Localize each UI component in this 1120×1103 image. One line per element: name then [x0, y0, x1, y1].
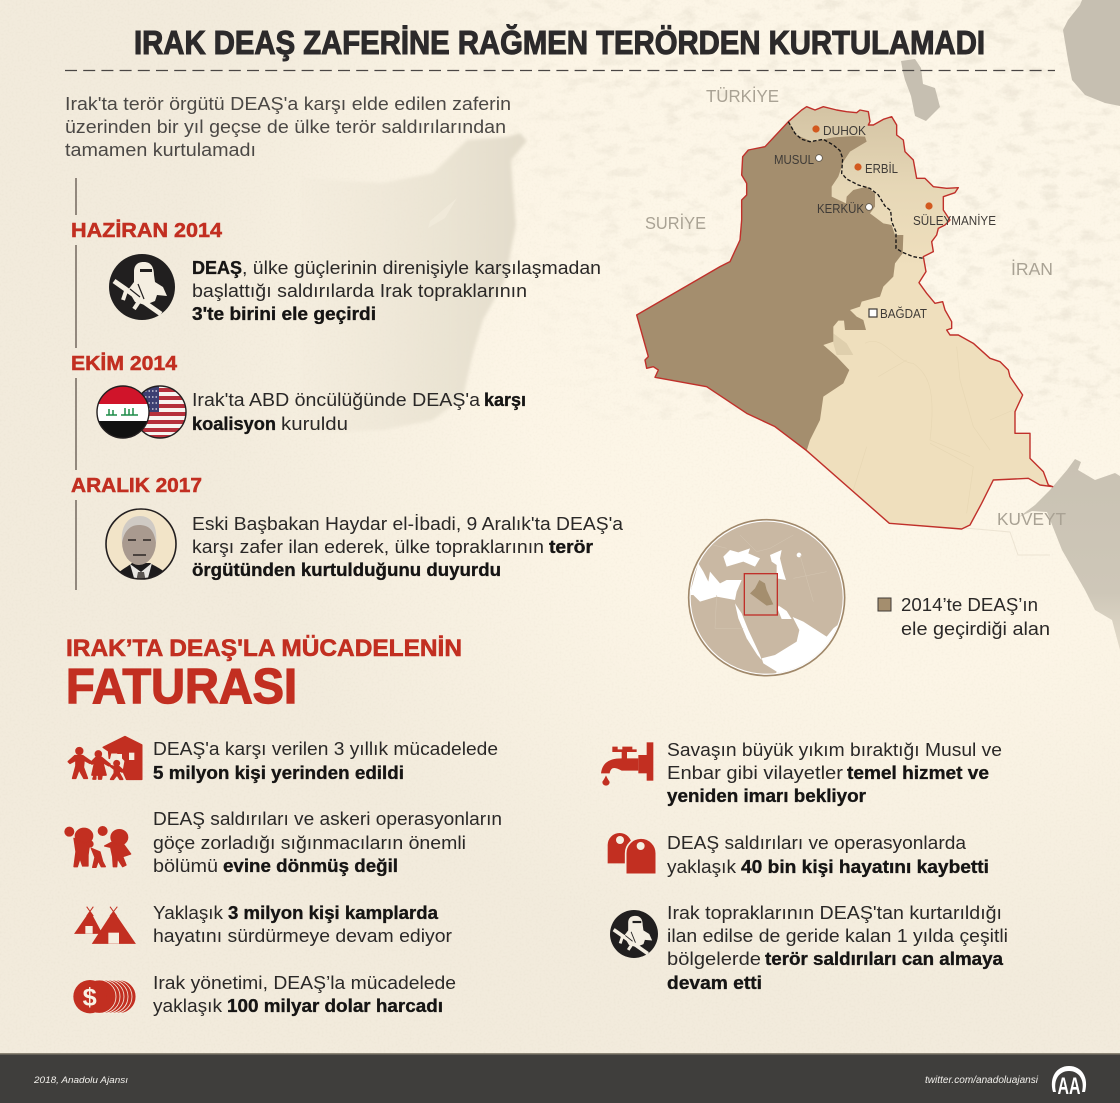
neighbouring country labels: TÜRKİYE — [706, 86, 779, 106]
icon: tents — [75, 907, 135, 944]
text: ongoing attacks: bölgelerde — [667, 948, 761, 969]
logo: Anadolu Agency: AA — [1058, 1073, 1080, 1100]
text: Ekim 2014: karşı — [484, 389, 526, 410]
text: refugees: göçe zorladığı sığınmacıların önemli — [153, 832, 466, 853]
Iraq shape with DEAŞ-held area — [636, 106, 1054, 530]
intro text: üzerinden bir yıl geçse de ülke terör saldırılarından — [65, 116, 506, 137]
heading: Ekim 2014: EKİM 2014 — [71, 352, 178, 375]
footer twitter handle: twitter.com/anadoluajansi — [925, 1075, 1039, 1086]
city markers and labels: BAĞDAT — [880, 306, 927, 321]
heading: Aralık 2017: ARALIK 2017 — [71, 475, 202, 497]
text: deaths: DEAŞ saldırıları ve operasyonlarda — [667, 832, 967, 853]
neighbouring country labels: KUVEYT — [997, 509, 1066, 529]
text: Haziran 2014: 3'te birini ele geçirdi — [192, 303, 376, 324]
icon: refugees with bundles — [65, 827, 131, 867]
panel: right list — [601, 739, 1008, 993]
text: deaths — [667, 832, 989, 877]
neighbouring country labels — [645, 86, 1066, 529]
text: refugees: evine dönmüş değil — [223, 855, 398, 876]
text: spending: 100 milyar dolar harcadı — [227, 995, 443, 1016]
text: reconstruction: Savaşın büyük yıkım bıraktığı Musul ve — [667, 739, 1002, 760]
icon: US and Iraq flags — [97, 386, 186, 438]
text: ongoing attacks: Irak topraklarının DEAŞ'tan kurtarıldığı — [667, 902, 1002, 923]
city markers and labels: DUHOK — [823, 124, 867, 138]
text: reconstruction: temel hizmet ve — [847, 762, 989, 783]
icon: masked militant — [109, 254, 175, 320]
footer credit: 2018, Anadolu Ajansı — [33, 1075, 128, 1086]
text: refugees — [153, 808, 502, 876]
text: Ekim 2014: koalisyon — [192, 413, 276, 434]
text: ongoing attacks: devam etti — [667, 972, 762, 993]
text: ongoing attacks: ilan edilse de geride kalan 1 yılda çeşitli — [667, 925, 1008, 946]
text: deaths: 40 bin kişi hayatını kaybetti — [741, 856, 989, 877]
heading: cost of the fight: FATURASI — [66, 660, 297, 714]
text: ongoing attacks — [667, 902, 1008, 993]
heading: cost of the fight: IRAK’TA DEAŞ'LA MÜCADELENİN — [66, 635, 462, 662]
icon: masked militant small — [610, 910, 658, 958]
text: displaced — [153, 738, 498, 783]
text: Ekim 2014 — [192, 389, 526, 434]
icon: gravestones — [608, 833, 656, 874]
text: refugees: DEAŞ saldırıları ve askeri operasyonların — [153, 808, 502, 829]
city markers and labels: MUSUL — [774, 153, 814, 167]
icon: faucet — [601, 742, 653, 786]
text: displaced: DEAŞ'a karşı verilen 3 yıllık mücadelede — [153, 738, 498, 759]
DEAŞ-held area — [637, 122, 903, 451]
footer bar — [0, 1053, 1120, 1103]
text: Ekim 2014: kuruldu — [281, 413, 348, 434]
text: Haziran 2014: başlattığı saldırılarda Irak topraklarının — [192, 280, 527, 301]
icon: coins — [73, 980, 136, 1013]
legend text — [901, 594, 1050, 639]
text: displaced: 5 milyon kişi yerinden edildi — [153, 762, 404, 783]
text: deaths: yaklaşık — [667, 856, 737, 877]
text: spending: Irak yönetimi, DEAŞ’la mücadelede — [153, 972, 456, 993]
text: camps — [153, 902, 452, 946]
heading: cost of the fight — [66, 635, 462, 714]
text: Aralık 2017: karşı zafer ilan ederek, ülke topraklarının — [192, 536, 544, 557]
intro text — [65, 93, 511, 160]
text: reconstruction: Enbar gibi vilayetler — [667, 762, 843, 783]
icon: displaced family and house — [68, 737, 142, 779]
city markers and labels — [774, 124, 996, 321]
title: IRAK DEAŞ ZAFERİNE RAĞMEN TERÖRDEN KURTULAMADI — [134, 24, 985, 61]
icon: coins: $ — [83, 984, 97, 1012]
neighbouring country labels: İRAN — [1011, 259, 1053, 279]
intro text: Irak'ta terör örgütü DEAŞ'a karşı elde edilen zaferin — [65, 93, 511, 114]
text: Ekim 2014: Irak'ta ABD öncülüğünde DEAŞ'a — [192, 389, 481, 410]
legend text: ele geçirdiği alan — [901, 618, 1050, 639]
text: camps: 3 milyon kişi kamplarda — [228, 902, 439, 923]
text: Haziran 2014 — [192, 257, 601, 324]
text: camps: hayatını sürdürmeye devam ediyor — [153, 925, 452, 946]
Kurdistan region dashed boundary — [788, 122, 923, 258]
city markers and labels: ERBİL — [865, 162, 898, 176]
icon: portrait of Haydar el-Ibadi — [106, 509, 176, 582]
legend swatch — [878, 598, 891, 611]
text: Aralık 2017: Eski Başbakan Haydar el-İbadi, 9 Aralık'ta DEAŞ'a — [192, 513, 624, 534]
panel: timeline — [71, 178, 624, 590]
text: Aralık 2017 — [192, 513, 624, 580]
text: camps: Yaklaşık — [153, 902, 224, 923]
timeline rules — [75, 178, 77, 590]
text: spending: yaklaşık — [153, 995, 223, 1016]
text: ongoing attacks: terör saldırıları can almaya — [765, 948, 1004, 969]
panel: left list — [65, 737, 502, 1016]
border outline — [637, 107, 1053, 529]
title dashed rule — [65, 70, 1055, 72]
text: spending — [153, 972, 456, 1016]
text: refugees: bölümü — [153, 855, 218, 876]
text: Haziran 2014: DEAŞ — [192, 257, 242, 278]
city markers and labels: SÜLEYMANİYE — [913, 214, 996, 228]
text: Haziran 2014: , ülke güçlerinin direnişiyle karşılaşmadan — [242, 257, 601, 278]
text: reconstruction: yeniden imarı bekliyor — [667, 785, 866, 806]
city markers and labels: KERKÜK — [817, 202, 865, 216]
map of Iraq — [620, 80, 1070, 540]
heading: Haziran 2014: HAZİRAN 2014 — [71, 219, 223, 242]
legend — [878, 594, 1050, 639]
locator globe — [687, 518, 850, 682]
text: Aralık 2017: örgütünden kurtulduğunu duyurdu — [192, 559, 501, 580]
logo: Anadolu Agency — [1052, 1066, 1086, 1100]
intro text: tamamen kurtulamadı — [65, 139, 256, 160]
text: Aralık 2017: terör — [549, 536, 593, 557]
legend text: 2014’te DEAŞ’ın — [901, 594, 1038, 615]
text: reconstruction — [667, 739, 1002, 806]
neighbouring country labels: SURİYE — [645, 213, 706, 233]
